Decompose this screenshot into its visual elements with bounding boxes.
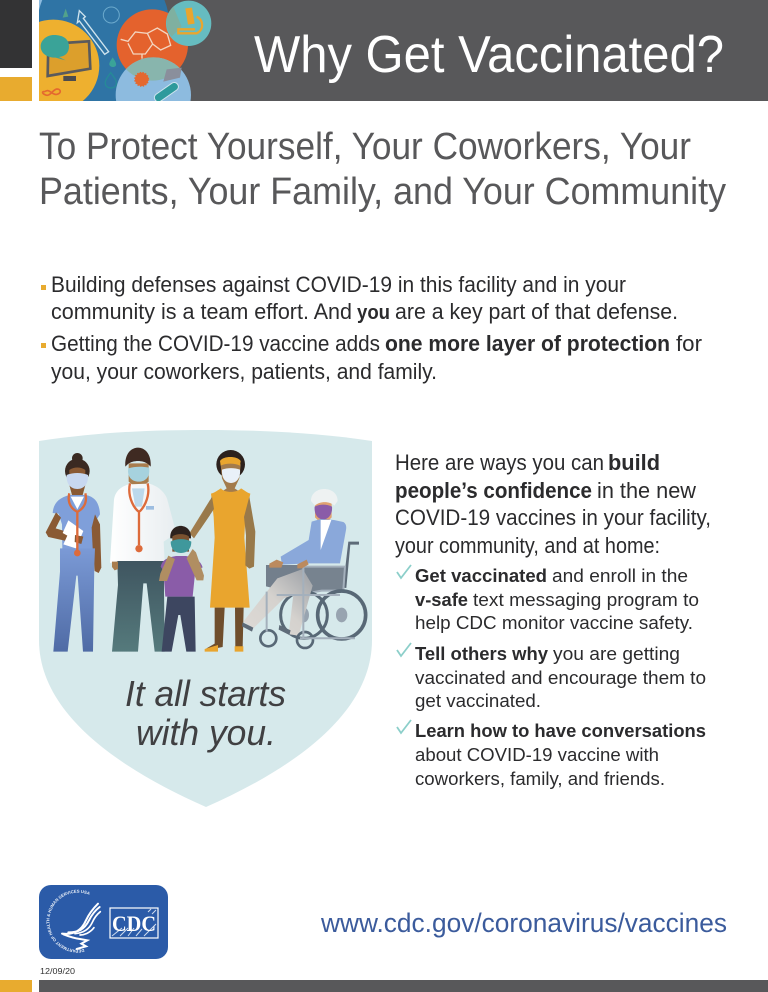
header yellow block	[0, 77, 32, 101]
bullet list: one more layer of protection	[385, 331, 670, 356]
title: Why Get Vaccinated?	[254, 26, 724, 84]
shield panel	[39, 430, 372, 807]
intro text: in the new	[597, 478, 696, 503]
doctor	[110, 448, 176, 652]
checklist: text messaging program to	[473, 589, 699, 610]
intro text: COVID-19 vaccines in your facility,	[395, 505, 711, 530]
bullet list: you, your coworkers, patients, and family.	[51, 359, 437, 384]
logo: HHS and CDC	[39, 885, 168, 959]
intro text	[395, 450, 711, 558]
intro text: people’s confidence	[395, 478, 592, 503]
bullet list: you	[357, 301, 390, 324]
bullet list: are a key part of that defense.	[395, 299, 678, 324]
bullet list	[41, 272, 702, 384]
checklist	[397, 565, 706, 789]
nurse	[46, 453, 101, 652]
subheading	[39, 126, 726, 213]
elder	[242, 489, 366, 648]
logo: HHS and CDC: DEPARTMENT OF HEALTH & HUMAN SERVICES USA	[46, 890, 90, 953]
bullet list: Building defenses against COVID-19 in this facility and in your	[51, 272, 626, 297]
checklist: Learn how to have conversations	[415, 720, 706, 741]
header illustration	[39, 0, 212, 101]
shield caption: with you.	[136, 712, 276, 753]
bullet list: for	[676, 331, 702, 356]
checklist: Tell others why	[415, 643, 549, 664]
shield caption: It all starts	[125, 673, 286, 714]
woman	[200, 450, 255, 652]
wheelchair back	[266, 542, 359, 638]
checklist: get vaccinated.	[415, 690, 541, 711]
checklist: v-safe	[415, 589, 468, 610]
footer bar	[39, 980, 768, 992]
date: 12/09/20	[40, 966, 75, 976]
checklist: and enroll in the	[552, 565, 688, 586]
url: www.cdc.gov/coronavirus/vaccines	[320, 908, 727, 938]
shield caption	[125, 673, 286, 753]
checklist: about COVID-19 vaccine with	[415, 744, 659, 765]
bullet list: Getting the COVID-19 vaccine adds	[51, 331, 380, 356]
intro text: your community, and at home:	[395, 533, 660, 558]
boy	[159, 500, 210, 652]
intro text: Here are ways you can	[395, 450, 604, 475]
checklist: vaccinated and encourage them to	[415, 667, 706, 688]
people illustration	[46, 448, 366, 652]
footer yellow block	[0, 980, 32, 992]
header dark block	[0, 0, 32, 68]
intro text: build	[608, 450, 660, 475]
logo: HHS and CDC: CDC	[112, 911, 156, 936]
checklist: Get vaccinated	[415, 565, 547, 586]
checklist: coworkers, family, and friends.	[415, 768, 665, 789]
subheading: To Protect Yourself, Your Coworkers, Your	[39, 126, 691, 168]
subheading: Patients, Your Family, and Your Community	[39, 171, 726, 213]
bullet list: community is a team effort. And	[51, 299, 352, 324]
checklist: help CDC monitor vaccine safety.	[415, 612, 693, 633]
header banner	[39, 0, 768, 101]
checklist: you are getting	[553, 643, 680, 664]
